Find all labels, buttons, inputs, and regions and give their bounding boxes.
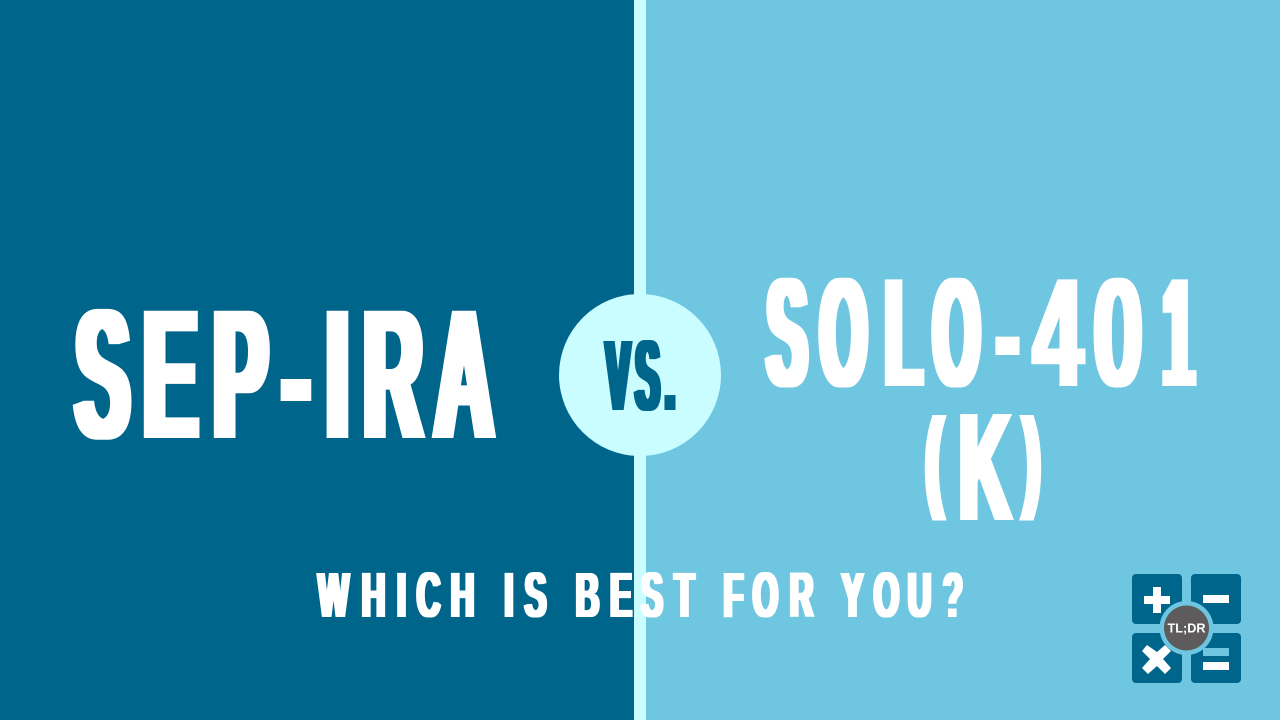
icon: TL;DR calculator logo bbox=[1132, 574, 1241, 683]
calculator key: equals bbox=[1191, 633, 1241, 683]
panel: left SEP-IRA background bbox=[0, 0, 634, 720]
heading: (K): K bbox=[959, 382, 1011, 553]
logo text: TL;DR bbox=[1168, 620, 1206, 636]
logo disc bbox=[1164, 606, 1209, 650]
heading: SOLO-401 bbox=[767, 245, 1194, 419]
center divider bbox=[634, 0, 646, 720]
badge circle bbox=[559, 294, 721, 456]
logo ring bbox=[1160, 601, 1214, 655]
heading: SOLO-401: 40 bbox=[1033, 245, 1143, 419]
calculator key: minus bbox=[1191, 574, 1241, 624]
calculator key: plus bbox=[1132, 574, 1182, 624]
heading: (K): ) bbox=[1023, 395, 1040, 521]
tagline: WHICH IS BEST FOR YOU? bbox=[318, 559, 963, 631]
heading: (K) bbox=[926, 382, 1040, 553]
heading: SOLO-401: SOLO- bbox=[767, 246, 1017, 419]
panel: right Solo 401(k) background bbox=[646, 0, 1280, 720]
heading: SOLO-401: 1 bbox=[1163, 246, 1194, 419]
vs badge bbox=[559, 294, 721, 456]
heading: (K): ( bbox=[926, 395, 944, 521]
badge label: VS.: VS. bbox=[606, 320, 675, 431]
calculator key: multiply bbox=[1132, 633, 1182, 683]
heading: SEP-IRA: SEP-IRA bbox=[75, 272, 493, 478]
